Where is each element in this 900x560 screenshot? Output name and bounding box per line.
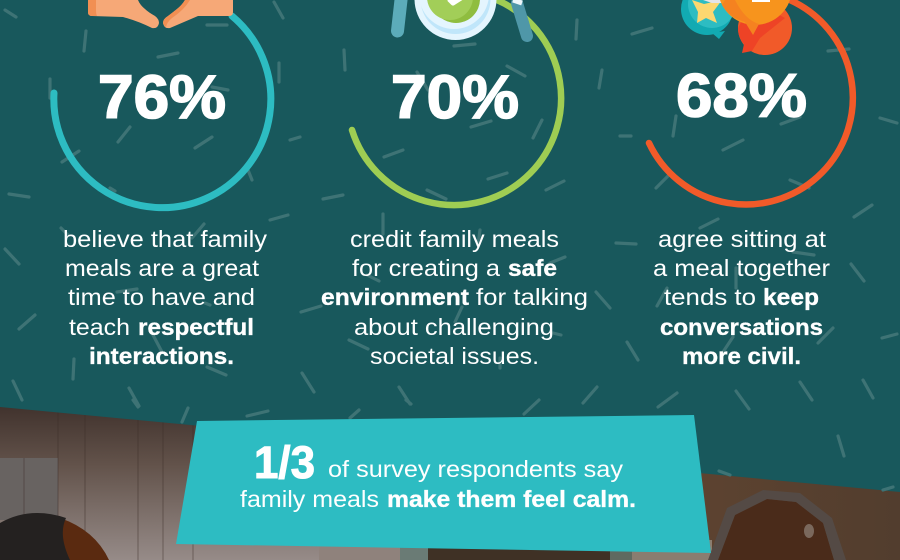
callout text: make them feel calm. [387, 486, 636, 512]
callout text: of survey respondents say [328, 456, 623, 482]
description: respectful interactions: believe that family [63, 226, 267, 252]
description: safe environment: credit family meals [350, 226, 559, 252]
description: safe environment [321, 226, 588, 369]
description: safe environment: for creating a [352, 255, 501, 281]
icon: speech bubbles [681, 0, 792, 55]
description: respectful interactions: meals are a great [65, 255, 259, 281]
description: safe environment: safe [508, 255, 557, 281]
progress ring 76% [54, 16, 271, 208]
progress ring 70% [352, 0, 561, 205]
description: respectful interactions: time to have and [68, 284, 255, 310]
description: safe environment: societal issues. [370, 343, 539, 369]
description: respectful interactions: teach [69, 314, 130, 340]
stat 1/3: 1/3 [254, 437, 315, 488]
stat 76%: 76% [98, 63, 226, 131]
callout: one third feel calm [176, 415, 711, 553]
panel: safe environment [321, 0, 588, 369]
description: civil conversations: a meal together [653, 255, 830, 281]
description: civil conversations: more civil. [682, 343, 801, 369]
icon: heart hands [88, 0, 233, 28]
description: safe environment: for talking [476, 284, 588, 310]
icon: plate and cutlery [398, 0, 527, 40]
person's head [0, 513, 109, 560]
description: safe environment: about challenging [354, 314, 554, 340]
stat 70%: 70% [391, 63, 519, 131]
description: civil conversations: conversations [660, 314, 823, 340]
mirror frame [708, 490, 846, 560]
description: respectful interactions [63, 226, 267, 369]
panel: respectful interactions [54, 0, 271, 369]
description: civil conversations: keep [763, 284, 819, 310]
description: respectful interactions: respectful [138, 314, 254, 340]
callout text [240, 456, 636, 512]
description: civil conversations: agree sitting at [658, 226, 827, 252]
description: safe environment: environment [321, 284, 469, 310]
progress ring 68% [649, 0, 853, 204]
stat 68%: 68% [676, 62, 807, 130]
callout text: family meals [240, 486, 379, 512]
description: civil conversations: tends to [664, 284, 756, 310]
panel: civil conversations [649, 0, 853, 369]
description: respectful interactions: interactions. [89, 343, 234, 369]
description: civil conversations [653, 226, 830, 369]
background photo: family room wall [0, 400, 900, 560]
